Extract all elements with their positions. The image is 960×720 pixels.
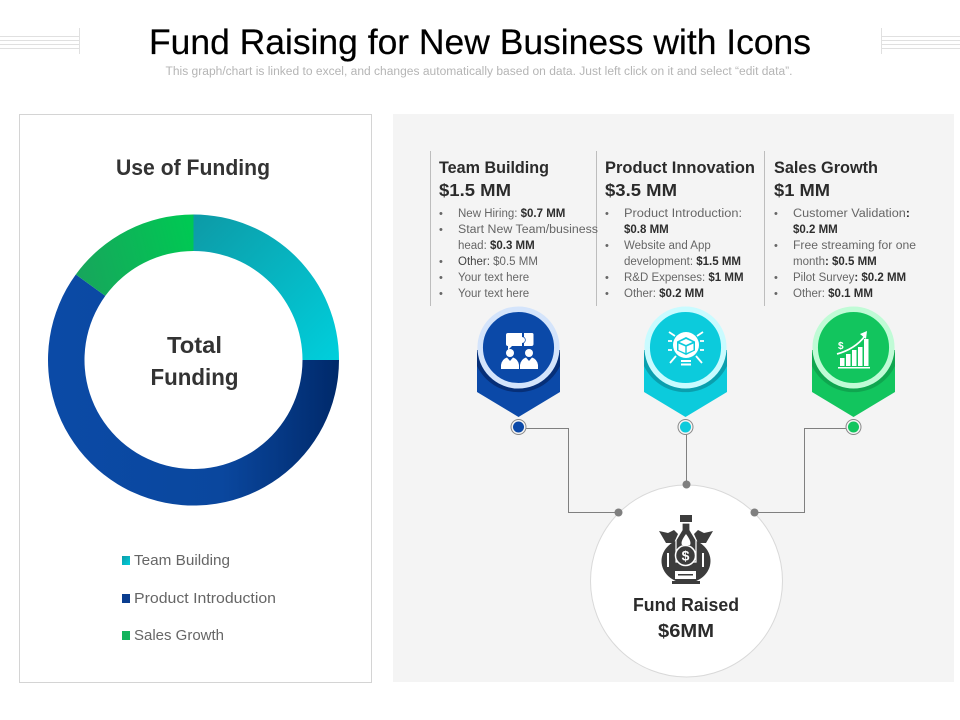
text block: team building: Team Building (439, 158, 549, 177)
text block: product innovation: • (605, 272, 609, 284)
text block: sales growth: $1 MM (774, 180, 830, 200)
text block: team building: $1.5 MM (439, 180, 511, 200)
node: sales growth (846, 420, 861, 434)
node: product innovation (678, 420, 693, 434)
text block: sales growth: Pilot Survey: $0.2 MM (793, 272, 906, 284)
text block: product innovation: Product Introduction: (624, 208, 742, 220)
text block: team building: Your text here (458, 272, 529, 284)
text block: team building: Other: $0.5 MM (458, 256, 538, 268)
panel: use of funding (20, 114, 372, 682)
text block: team building: head: $0.3 MM (458, 240, 535, 252)
text block: product innovation: R&D Expenses: $1 MM (624, 272, 744, 284)
panel: fund flow (393, 114, 954, 682)
text block: product innovation: Product Innovation (605, 158, 755, 177)
donut chart (48, 214, 339, 506)
legend: Team Building (134, 552, 230, 569)
text block: product innovation: • (605, 240, 609, 252)
marker: team building (477, 309, 560, 417)
icon: money bags: $ (682, 548, 690, 564)
legend: Product Introduction (134, 590, 276, 607)
text block: product innovation: Other: $0.2 MM (624, 288, 704, 300)
text block: sales growth: • (774, 208, 778, 220)
connectors (525, 428, 847, 512)
marker: product innovation (644, 309, 727, 417)
legend: Sales Growth (134, 627, 224, 644)
donut centre label: Total (167, 332, 222, 358)
text block: team building (439, 158, 598, 300)
donut centre label: Funding (150, 364, 238, 390)
text block: product innovation (605, 158, 755, 300)
text block: sales growth: $0.2 MM (793, 224, 838, 236)
title: Fund Raising for New Business with Icons (149, 23, 811, 62)
text block: team building: Start New Team/business (458, 224, 598, 236)
text block: team building: • (439, 288, 443, 300)
node: team building (511, 420, 526, 434)
marker: sales growth (812, 309, 895, 417)
legend (122, 552, 276, 644)
icon: money bags (659, 515, 713, 584)
text block: product innovation: $0.8 MM (624, 224, 669, 236)
heading: use of funding: Use of Funding (116, 155, 270, 180)
text block: team building: Your text here (458, 288, 529, 300)
text block: sales growth: Free streaming for one (793, 240, 916, 252)
text block: sales growth: month: $0.5 MM (793, 256, 877, 268)
text block: team building: • (439, 208, 443, 220)
text block: team building: • (439, 224, 443, 236)
text block: product innovation: $3.5 MM (605, 180, 677, 200)
decorative: header lines (0, 28, 960, 54)
text block: sales growth: • (774, 272, 778, 284)
icon: team with puzzle speech bubbles (501, 333, 538, 369)
text block: sales growth (774, 158, 916, 300)
column dividers (430, 151, 764, 306)
text block: product innovation: • (605, 208, 609, 220)
text block: sales growth: Other: $0.1 MM (793, 288, 873, 300)
text block: product innovation: • (605, 288, 609, 300)
text block: sales growth: Sales Growth (774, 158, 878, 177)
label: fund raised: $6MM (658, 621, 714, 641)
icon: growth chart: $ (838, 341, 844, 352)
text block: product innovation: development: $1.5 MM (624, 256, 741, 268)
text block: team building: • (439, 256, 443, 268)
circle: fund raised (590, 485, 782, 677)
subtitle: This graph/chart is linked to excel, and changes automatically based on data. Just left click on it and select “edit data”. (166, 66, 792, 78)
text block: team building: • (439, 272, 443, 284)
text block: sales growth: Customer Validation : (793, 208, 910, 220)
text block: product innovation: Website and App (624, 240, 711, 252)
label: fund raised: Fund Raised (633, 595, 739, 615)
connector end dots (614, 480, 758, 516)
icon: product cube in light bulb with circuits (668, 332, 704, 366)
text block: team building: New Hiring: $0.7 MM (458, 208, 565, 220)
text block: sales growth: • (774, 288, 778, 300)
text block: sales growth: • (774, 240, 778, 252)
